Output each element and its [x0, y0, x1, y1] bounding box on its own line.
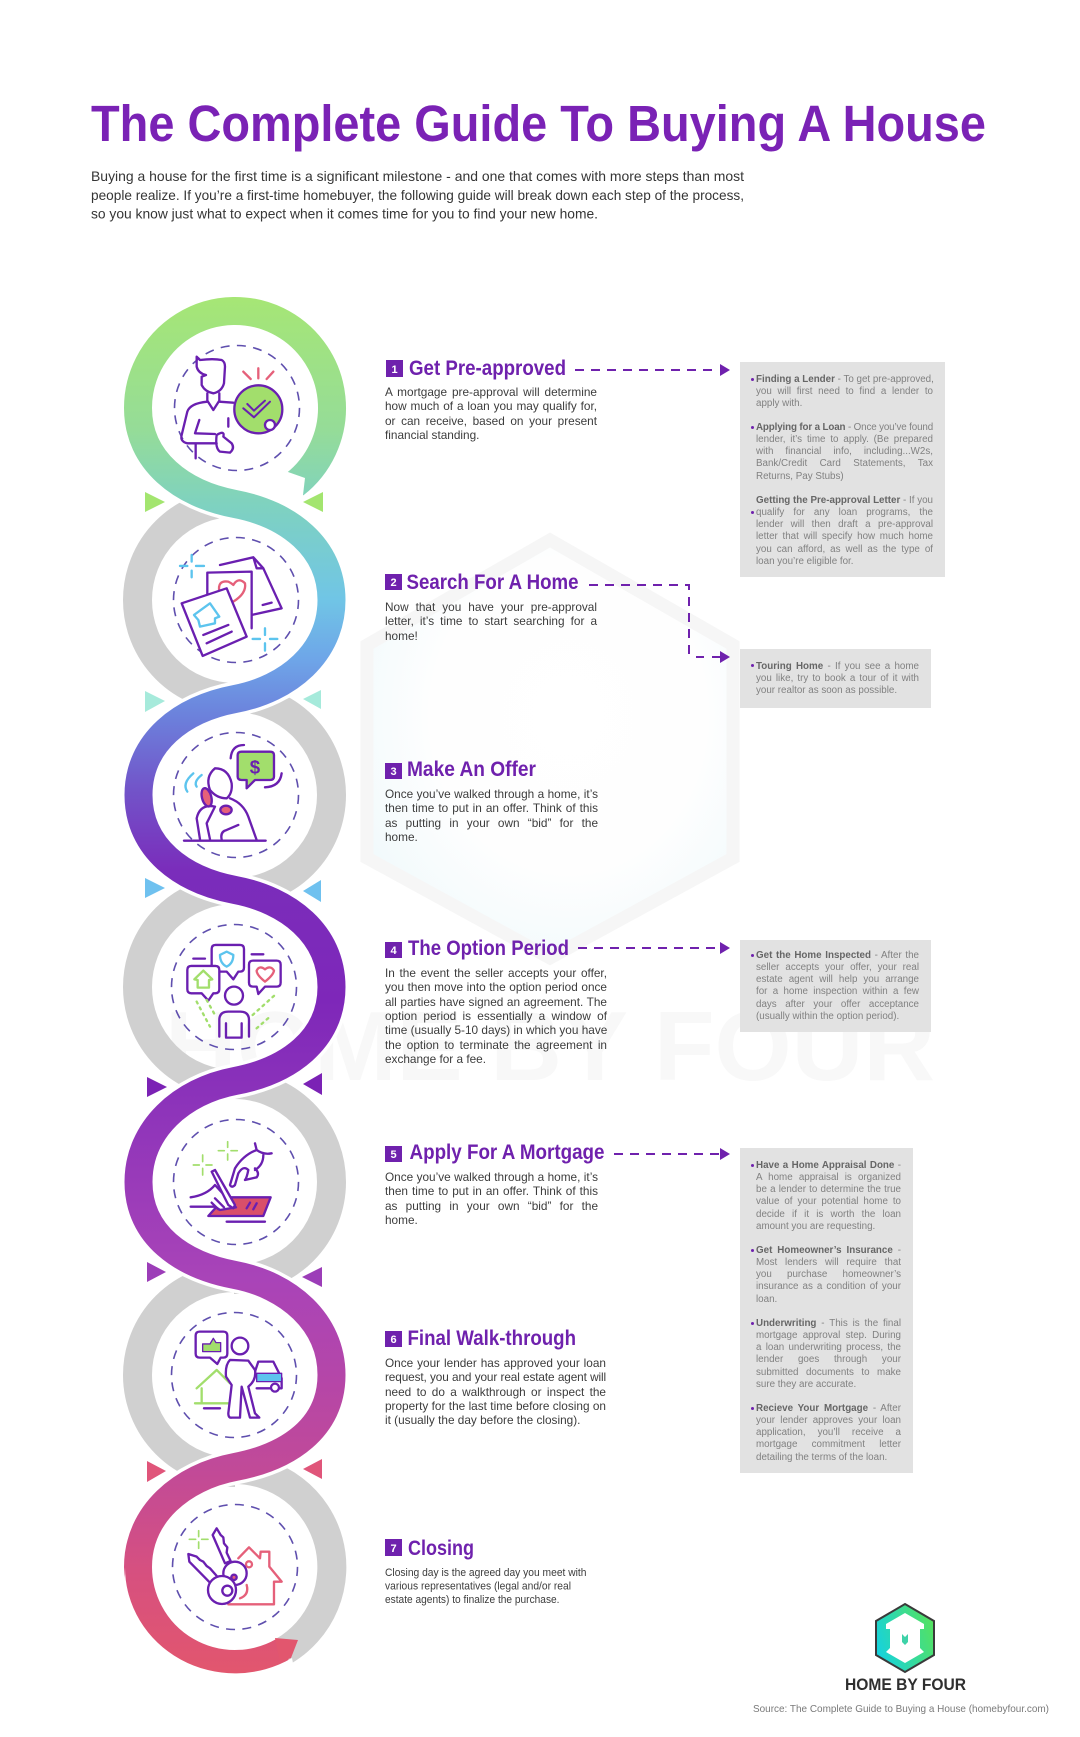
text: step 3 body: as putting in your own “bid” for the — [385, 816, 598, 830]
heading: step 1: Get Pre-approved — [409, 357, 566, 380]
panel: pre-approval details: you can afford, as well as the type of — [756, 544, 933, 554]
panel: touring home details: Touring Home - If you see a home — [756, 661, 919, 672]
arrow: step 4 to details — [578, 942, 730, 954]
panel: pre-approval details: lender will then draft a pre-approval — [756, 519, 933, 530]
text: step 5 body — [385, 1170, 598, 1227]
text: step 4 body: time (usually 5-10 days) in which you have — [385, 1023, 607, 1037]
text: step 2 body — [385, 600, 598, 643]
text: step 7 body: estate agents) to finalize the purchase. — [385, 1594, 560, 1606]
arrow: step 2 to details — [589, 585, 730, 663]
logo: Home By Four: HOME BY FOUR — [845, 1675, 966, 1694]
panel: mortgage details: A home appraisal is organized — [756, 1172, 901, 1183]
watermark hexagon — [367, 540, 733, 958]
panel: home inspection details: seller accepts your offer, your real — [756, 962, 919, 973]
panel: mortgage details: decide if it is worth the loan — [756, 1208, 901, 1220]
panel: mortgage details: detailing the terms of the loan. — [756, 1452, 887, 1462]
icon: signing mortgage — [191, 1142, 272, 1222]
text: step 7 body: Closing day is the agreed day you meet with — [385, 1567, 586, 1579]
heading: step 2: 2 — [390, 577, 397, 589]
text: step 6 body: Once your lender has approved your loan — [385, 1356, 606, 1370]
icon: person with approval badge — [181, 357, 282, 458]
text: step 1 body: A mortgage pre-approval will determine — [385, 385, 597, 399]
heading: step 4: 4 — [390, 945, 397, 957]
panel: mortgage details: a loan underwriting process, the — [756, 1342, 901, 1353]
panel: home inspection details: (usually within the option period). — [756, 1011, 899, 1022]
panel: mortgage details: be a lender to determine the true — [756, 1184, 901, 1195]
text: step 5 body: Once you’ve walked through a home, it’s — [385, 1170, 598, 1184]
title: The Complete Guide To Buying A House — [91, 95, 986, 152]
icon: house documents — [180, 555, 282, 656]
text: step 5 body: then time to put in an offer. Think of this — [385, 1184, 598, 1198]
panel: mortgage details: sure they are accurate. — [756, 1379, 856, 1390]
panel: pre-approval details: Returns, Pay Stubs) — [756, 470, 844, 482]
text: step 6 body: need to do a walkthrough or inspect the — [385, 1385, 606, 1399]
heading: step 3: Make An Offer — [407, 758, 536, 781]
text: step 3 body: home. — [385, 830, 418, 844]
panel: home inspection details: days after your offer acceptance — [756, 998, 919, 1010]
panel: mortgage details: Underwriting - This is the final — [756, 1318, 901, 1329]
crossing triangles — [145, 492, 323, 1482]
arrow: step 1 to details — [575, 364, 730, 376]
text: step 6 body: it (usually the day before the closing). — [385, 1413, 580, 1427]
panel: mortgage details: submitted documents to make — [756, 1366, 901, 1378]
panel: mortgage details: lender goes through your — [756, 1354, 901, 1365]
text: step 1 body: how much of a loan you may qualify for, — [385, 399, 597, 413]
panel: mortgage details: value of your potential home to — [756, 1196, 901, 1207]
panel: pre-approval details: letter that will specify how much home — [756, 531, 933, 542]
panel: pre-approval details: lender, it’s time to apply. (Be prepared — [756, 434, 933, 445]
heading: step 2: Search For A Home — [406, 571, 578, 594]
icon: phone offer: $ — [250, 756, 261, 777]
text: step 4 body: In the event the seller accepts your offer, — [385, 966, 607, 980]
panel: mortgage details — [740, 1148, 913, 1473]
heading: step 4: The Option Period — [408, 937, 569, 960]
intro paragraph: so you know just what to expect when it comes time for you to find your new home. — [91, 207, 598, 222]
panel: pre-approval details: Getting the Pre-approval Letter - If you — [756, 495, 933, 506]
text: step 6 body: property for the last time before closing on — [385, 1399, 606, 1413]
text: step 1 body — [385, 385, 597, 442]
panel: touring home details: your realtor as soon as possible. — [756, 685, 897, 696]
panel: pre-approval details — [740, 362, 945, 577]
ribbon white halo — [138, 408, 332, 1567]
text: step 3 body: Once you’ve walked through a home, it’s — [385, 787, 598, 801]
text: step 4 body: you then move into the option period once — [385, 980, 607, 994]
text: step 1 body: or can receive, based on your present — [385, 414, 597, 428]
logo: Home By Four — [845, 1604, 966, 1694]
panel: home inspection details: Get the Home Inspected - After the — [756, 950, 919, 961]
panel: mortgage details: application, you’ll receive a — [756, 1427, 901, 1438]
heading: step 7 — [385, 1537, 474, 1560]
grey rings behind ribbon — [138, 502, 332, 1652]
panel: mortgage details: mortgage approval step. During — [756, 1330, 901, 1341]
text: step 2 body: Now that you have your pre-approval — [385, 600, 597, 614]
heading: step 7: Closing — [408, 1537, 474, 1560]
panel: mortgage details: Most lenders will require that — [756, 1257, 901, 1268]
heading: step 7: 7 — [390, 1543, 397, 1555]
icon: option chat bubbles — [187, 945, 281, 1038]
icon: phone offer — [184, 745, 282, 841]
heading: step 6: 6 — [390, 1334, 397, 1346]
panel: mortgage details: amount you are requesting. — [756, 1221, 875, 1232]
panel: mortgage details: you purchase homeowner’s — [756, 1269, 901, 1280]
icon: walk-through person with house and car — [195, 1332, 282, 1418]
text: step 4 body — [385, 966, 608, 1066]
text: step 2 body: home! — [385, 629, 418, 643]
heading: step 5: 5 — [390, 1149, 397, 1161]
text: step 7 body — [385, 1567, 586, 1606]
panel: mortgage details: mortgage commitment letter — [756, 1439, 901, 1450]
panel: pre-approval details: loan you’re eligible for. — [756, 556, 854, 567]
text: step 3 body — [385, 787, 598, 844]
panel: pre-approval details: with financial info, including...W2s, — [756, 446, 933, 457]
arrow: step 5 to details — [614, 1148, 730, 1160]
text: step 6 body: request, you and your real estate agent will — [385, 1370, 606, 1384]
panel: touring home details: you like, try to book a tour of it with — [756, 673, 919, 684]
panel: pre-approval details: apply with. — [756, 398, 802, 409]
source line: Source: The Complete Guide to Buying a House (homebyfour.com) — [753, 1703, 1049, 1715]
text: step 5 body: home. — [385, 1213, 418, 1227]
panel: mortgage details: Have a Home Appraisal Done - — [756, 1160, 901, 1171]
text: step 6 body — [385, 1356, 606, 1427]
icon: keys and house — [188, 1528, 282, 1604]
watermark text: HOME BY FOUR — [165, 991, 935, 1101]
panel: home inspection details — [740, 940, 930, 1032]
text: step 4 body: all parties have signed an agreement. The — [385, 995, 607, 1009]
text: step 7 body: various representatives (legal and/or real — [385, 1580, 571, 1592]
panel: mortgage details: loan. — [756, 1294, 777, 1304]
dashed circles — [172, 346, 300, 1630]
heading: step 6: Final Walk-through — [408, 1327, 576, 1350]
text: step 5 body: as putting in your own “bid” for the — [385, 1199, 598, 1213]
heading: step 5: Apply For A Mortgage — [410, 1141, 604, 1164]
panel: home inspection details: for a home inspection within a few — [756, 986, 919, 997]
panel: pre-approval details: you will first need to find a lender to — [756, 386, 933, 397]
gradient ribbon — [120, 311, 332, 1690]
panel: home inspection details: estate agent will help you arrange — [756, 974, 919, 985]
intro paragraph: people realize. If you’re a first-time homebuyer, the following guide will break down each step of the process, — [91, 188, 744, 203]
panel: pre-approval details: Finding a Lender - To get pre-approved, — [756, 374, 934, 385]
text: step 4 body: option period is essentially a window of — [385, 1009, 607, 1023]
text: step 4 body: the option to terminate the agreement in — [385, 1038, 607, 1052]
text: step 2 body: letter, it’s time to start searching for a — [385, 614, 597, 628]
heading: step 3: 3 — [390, 766, 397, 778]
text: step 4 body: exchange for a fee. — [385, 1052, 486, 1066]
panel: mortgage details: your lender approves your loan — [756, 1415, 901, 1426]
intro paragraph: Buying a house for the first time is a significant milestone - and one that comes with more steps than most — [91, 169, 744, 184]
text: step 1 body: financial standing. — [385, 428, 479, 442]
text: step 3 body: then time to put in an offer. Think of this — [385, 801, 598, 815]
panel: mortgage details: Get Homeowner’s Insurance - — [756, 1245, 901, 1256]
panel: mortgage details: Recieve Your Mortgage - After — [756, 1403, 901, 1414]
panel: mortgage details: insurance as a condition of your — [756, 1281, 901, 1292]
heading: step 1: 1 — [391, 364, 398, 376]
panel: pre-approval details: Applying for a Loan - Once you’ve found — [756, 422, 933, 433]
panel: pre-approval details: Bank/Credit Card Statements, Tax — [756, 458, 933, 469]
panel: touring home details — [740, 649, 930, 708]
panel: pre-approval details: qualify for any loan programs, the — [756, 507, 933, 518]
intro paragraph — [91, 169, 744, 222]
